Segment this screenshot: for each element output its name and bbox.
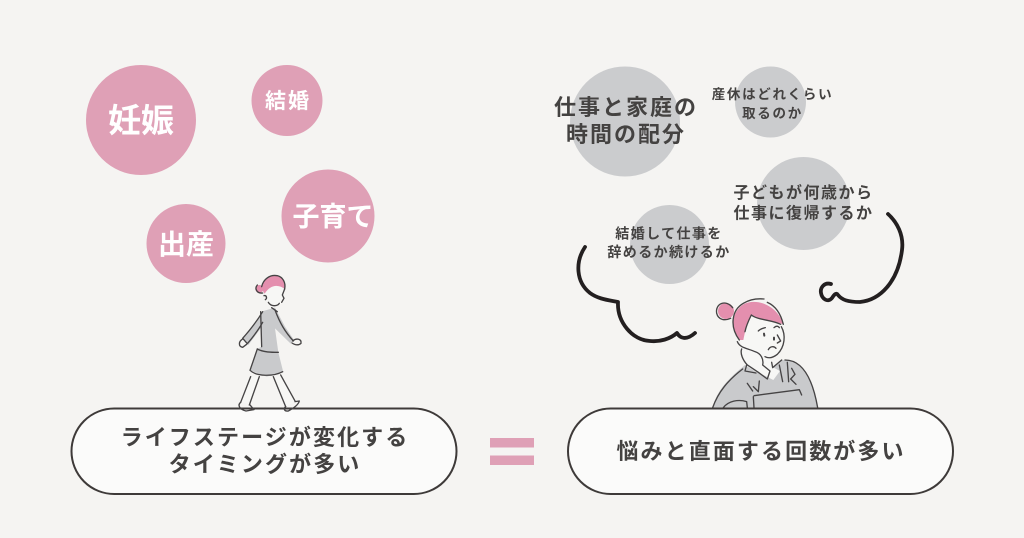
bubble: returning to work: 子どもが何歳から	[733, 183, 874, 202]
illustration: worried woman	[713, 299, 818, 408]
bubble: work and family time: 仕事と家庭の	[554, 95, 698, 120]
bubble: pregnancy	[86, 65, 196, 175]
thought cloud outline: right	[821, 214, 902, 302]
pill: life stage changes	[72, 408, 456, 494]
bubble: returning to work: 仕事に復帰するか	[733, 204, 874, 222]
bubble: marriage	[252, 65, 322, 136]
illustration: walking woman	[239, 275, 301, 411]
bubble: marriage: 結婚	[265, 90, 311, 113]
bubble: pregnancy: 妊娠	[108, 102, 174, 139]
bubble: quit or continue after marriage: 結婚して仕事を	[615, 226, 723, 242]
bubble: work and family time	[554, 66, 698, 176]
bubble: child rearing	[282, 170, 374, 262]
pill: life stage changes: ライフステージが変化する	[121, 425, 409, 450]
pill: facing worries: 悩みと直面する回数が多い	[616, 439, 906, 464]
bubble: quit or continue after marriage	[607, 205, 731, 284]
bubble: maternity leave length: 取るのか	[742, 106, 803, 121]
equals sign	[490, 438, 534, 465]
bubble: child rearing: 子育て	[292, 202, 374, 232]
bubble: childbirth	[146, 204, 226, 283]
pill: life stage changes: タイミングが多い	[169, 452, 361, 477]
life events bubbles	[86, 65, 374, 283]
bubble: maternity leave length: 産休はどれくらい	[712, 86, 833, 102]
bubble: maternity leave length	[712, 66, 833, 138]
bubble: work and family time: 時間の配分	[566, 122, 686, 147]
bubble: quit or continue after marriage: 辞めるか続けるか	[607, 244, 731, 260]
bubble: childbirth: 出産	[158, 229, 214, 260]
pill: facing worries	[568, 408, 953, 494]
worry bubbles	[554, 66, 874, 284]
bubble: returning to work	[733, 157, 874, 250]
thought cloud outline: left	[578, 247, 695, 341]
